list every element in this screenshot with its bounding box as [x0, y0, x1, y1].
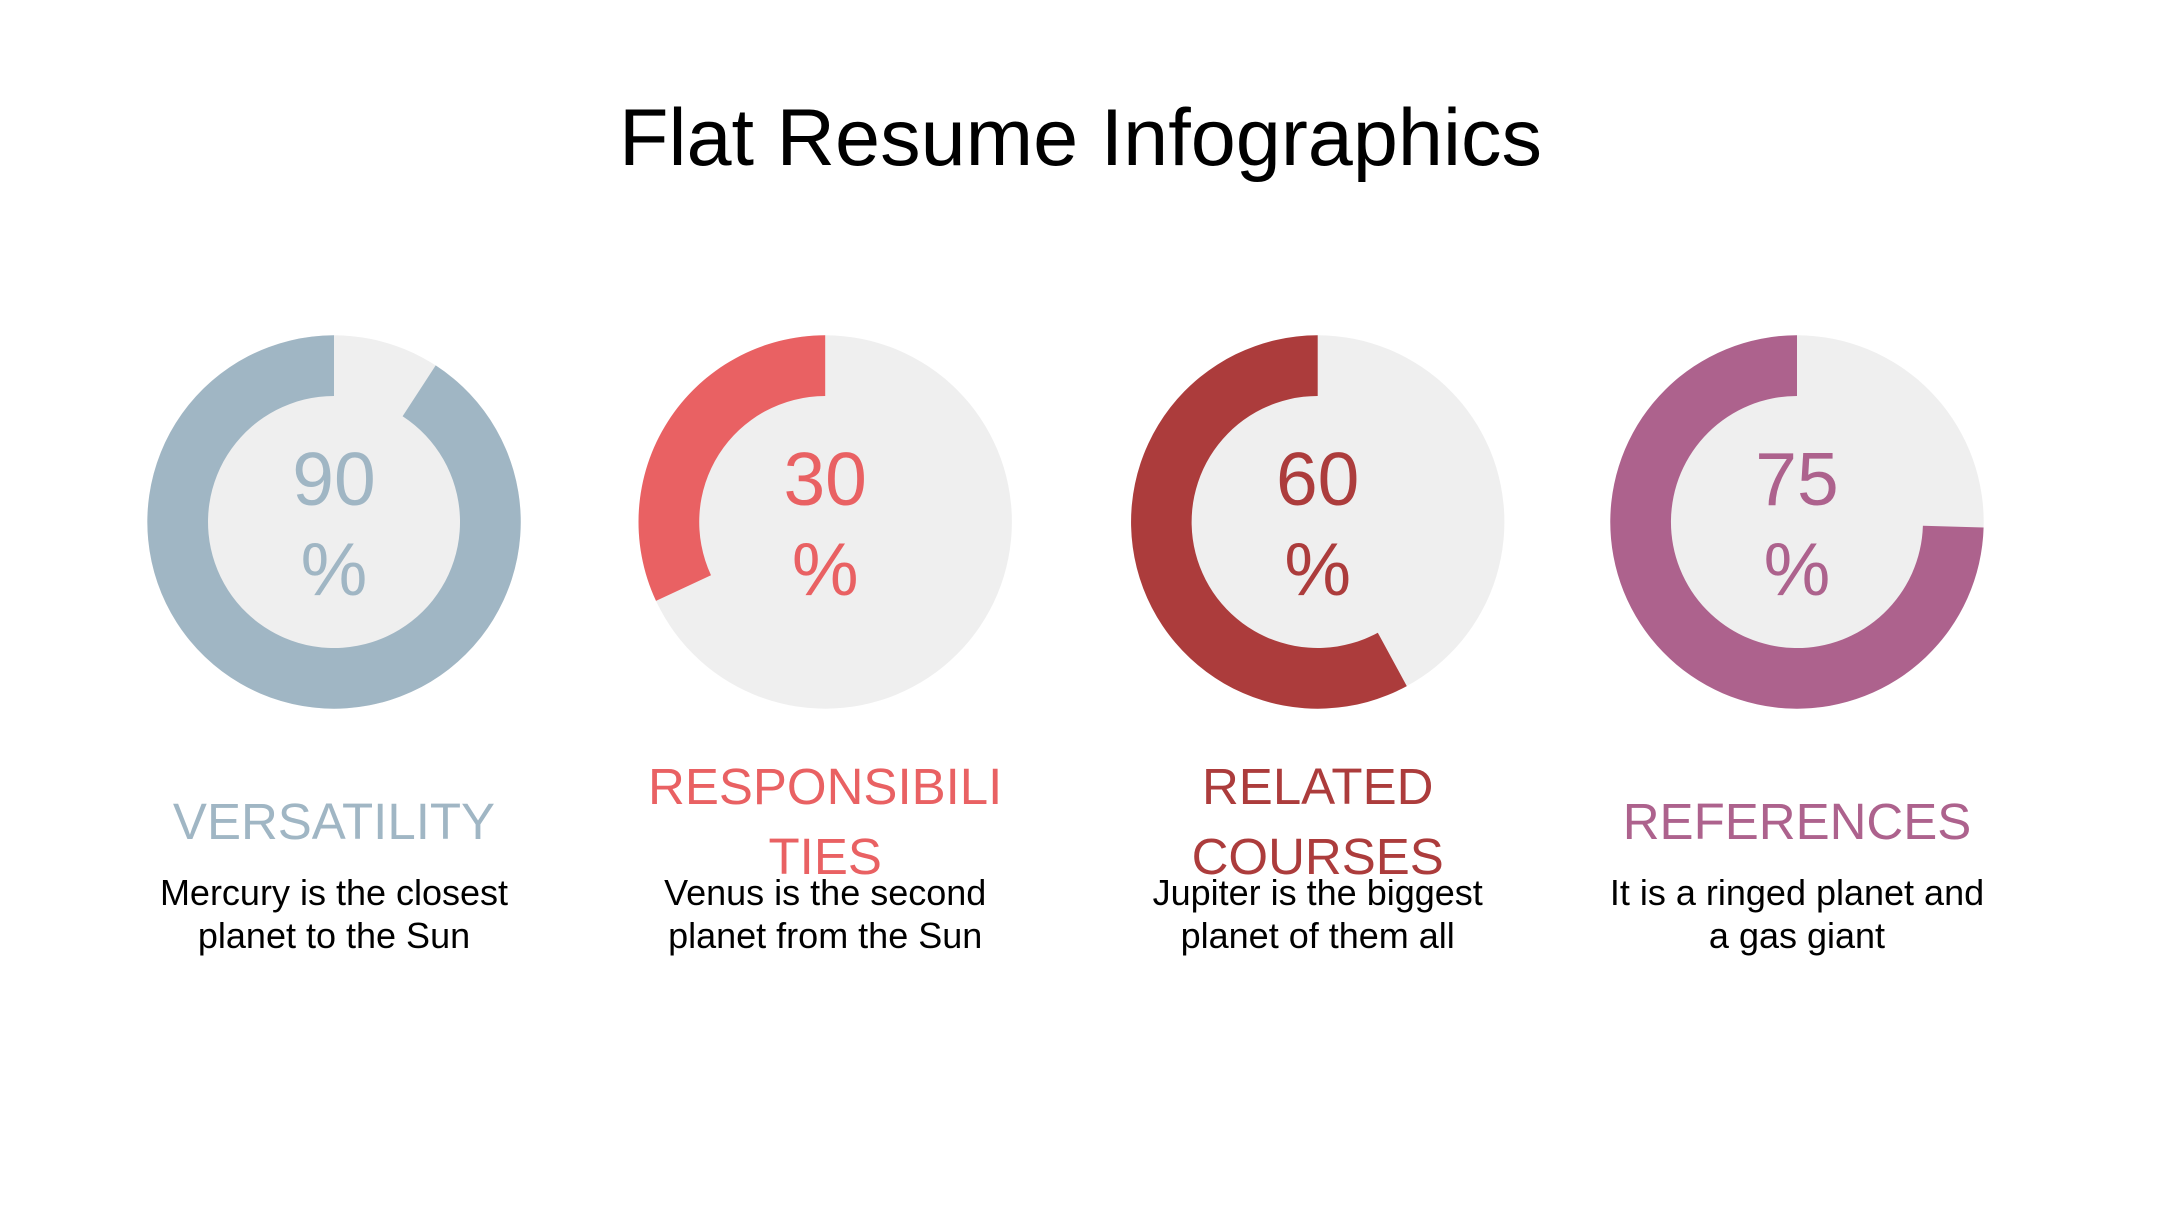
description: a gas giant	[1709, 915, 1885, 956]
percentage value: 75	[1755, 437, 1839, 521]
label: RESPONSIBILI	[648, 758, 1002, 815]
description: planet of them all	[1181, 915, 1455, 956]
label: COURSES	[1192, 828, 1444, 885]
description: It is a ringed planet and	[1610, 872, 1984, 913]
description: planet from the Sun	[668, 915, 982, 956]
label: REFERENCES	[1623, 793, 1971, 850]
description: Jupiter is the biggest	[1153, 872, 1483, 913]
donut chart: 30%	[638, 335, 1012, 709]
percentage value: %	[1284, 527, 1351, 611]
description: Venus is the second	[664, 872, 986, 913]
panel: responsibilities	[638, 335, 1012, 956]
donut chart: 75%	[1610, 335, 1984, 709]
label: RELATED	[1202, 758, 1433, 815]
panel: related courses	[1131, 335, 1504, 956]
percentage value: %	[792, 527, 859, 611]
panel: versatility	[147, 335, 521, 956]
panel: references	[1610, 335, 1984, 956]
percentage value: %	[301, 527, 367, 611]
donut chart: 60%	[1131, 335, 1504, 709]
title: Flat Resume Infographics	[619, 93, 1542, 183]
description: planet to the Sun	[198, 915, 470, 956]
donut chart: 90%	[147, 335, 521, 709]
description: Mercury is the closest	[160, 872, 508, 913]
percentage value: 60	[1276, 437, 1359, 521]
label: TIES	[769, 828, 882, 885]
label: VERSATILITY	[173, 793, 495, 850]
percentage value: 90	[292, 437, 376, 521]
percentage value: %	[1764, 527, 1830, 611]
percentage value: 30	[783, 437, 867, 521]
